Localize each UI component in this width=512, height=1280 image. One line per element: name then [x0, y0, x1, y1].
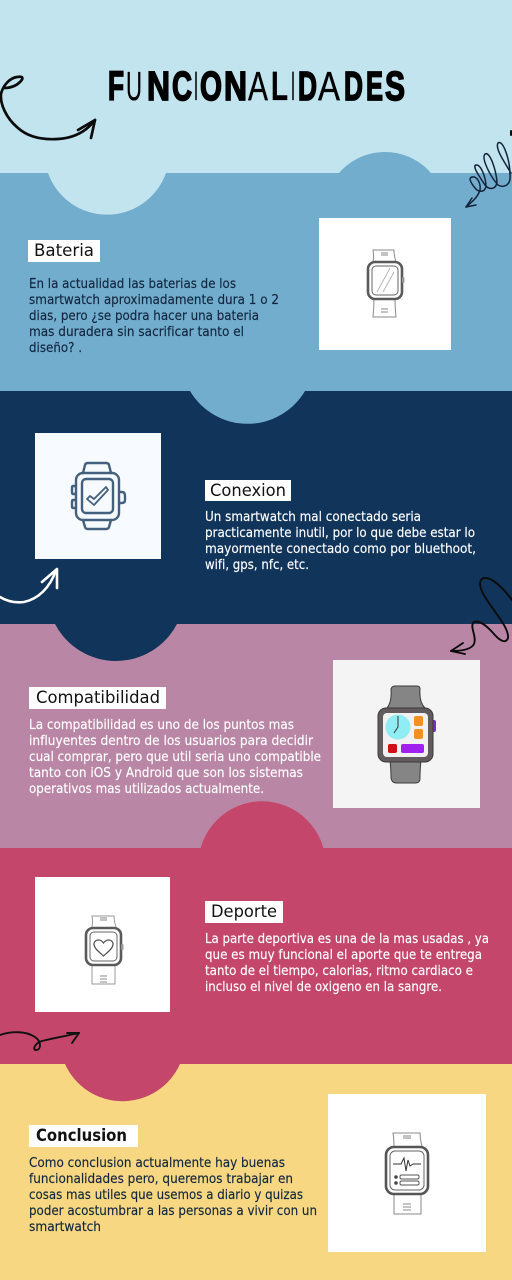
text block: conexion: practicamente inutil, por lo que debe estar lo — [205, 526, 475, 541]
section: conexion — [35, 433, 476, 573]
panel: conclusion background — [0, 1064, 512, 1280]
arrow: spring arrow — [466, 131, 511, 207]
title — [108, 63, 405, 109]
title: E — [366, 63, 383, 109]
section: bateria — [28, 218, 451, 356]
arrow: white curved arrow — [0, 569, 57, 602]
text block: conclusion: poder acostumbrar a las personas a vivir con un — [29, 1204, 317, 1219]
text block: deporte — [205, 932, 489, 995]
heading: bateria: Bateria — [34, 241, 94, 260]
arrow: deporte arrow — [0, 1032, 79, 1050]
text block: compatibilidad: cual comprar, pero que util seria uno compatible — [29, 750, 321, 765]
heading: conexion: Conexion — [210, 481, 286, 500]
heading: deporte: Deporte — [211, 902, 277, 921]
title: N — [147, 63, 170, 109]
text block: bateria: mas duradera sin sacrificar tanto el — [29, 325, 244, 340]
title: O — [200, 63, 222, 109]
title: C — [172, 63, 192, 109]
text block: compatibilidad: tanto con iOS y Android que son los sistemas — [29, 766, 303, 781]
text block: bateria — [29, 277, 279, 356]
text block: bateria: En la actualidad las baterias de los — [29, 277, 236, 292]
decorative scallop: header into bateria — [48, 173, 166, 215]
panel: header background — [0, 0, 512, 173]
title: A — [248, 63, 268, 109]
image: plain smartwatch — [319, 218, 451, 350]
text block: deporte: tanto de el tiempo, calorias, ritmo cardiaco e — [205, 964, 473, 979]
text block: conclusion: Como conclusion actualmente hay buenas — [29, 1156, 285, 1171]
text block: deporte: que es muy funcional el aporte que te entrega — [205, 948, 482, 963]
panel: conexion background — [0, 391, 512, 624]
text block: bateria: smartwatch aproximadamente dura 1 o 2 — [29, 293, 279, 308]
panel: compatibilidad background — [0, 624, 512, 848]
decorative scallop: bateria into conexion — [190, 391, 305, 424]
text block: conclusion — [29, 1156, 317, 1235]
panel: deporte background — [0, 801, 512, 1064]
title: D — [298, 63, 317, 109]
image: colourful smartwatch — [333, 660, 480, 808]
title: A — [318, 63, 341, 109]
panel: bateria background — [0, 152, 512, 391]
text block: deporte: La parte deportiva es una de la mas usadas , ya — [205, 932, 489, 947]
text block: compatibilidad — [29, 718, 321, 797]
image: watch with heart — [35, 877, 170, 1012]
decorative scallop: deporte into conclusion — [65, 1064, 180, 1101]
heading: conclusion: Conclusion — [36, 1126, 127, 1145]
text block: bateria: diseño? . — [29, 341, 82, 356]
section: deporte — [35, 877, 489, 1012]
title: S — [385, 63, 405, 109]
title: L — [271, 63, 288, 109]
text block: deporte: incluso el nivel de oxigeno en la sangre. — [205, 980, 442, 995]
arrow: looped header arrow — [1, 77, 95, 139]
decorative scallop: conexion into compatibilidad — [55, 624, 177, 661]
section: compatibilidad — [29, 660, 480, 808]
text block: compatibilidad: operativos mas utilizados actualmente. — [29, 782, 264, 797]
title: F — [108, 63, 124, 109]
title: D — [344, 63, 363, 109]
text block: conclusion: funcionalidades pero, queremos trabajar en — [29, 1172, 293, 1187]
text block: conexion: Un smartwatch mal conectado seria — [205, 510, 421, 525]
image: watch with heart-rate display — [328, 1094, 486, 1252]
heading: compatibilidad: Compatibilidad — [36, 688, 160, 707]
text block: conclusion: cosas mas utiles que usemos a diario y quizas — [29, 1188, 303, 1203]
text block: conclusion: smartwatch — [29, 1220, 101, 1235]
text block: compatibilidad: influyentes dentro de los usuarios para decidir — [29, 734, 314, 749]
text block: conexion: wifi, gps, nfc, etc. — [205, 558, 309, 573]
image: watch with check mark — [35, 433, 161, 559]
text block: conexion — [205, 510, 476, 573]
section: conclusion — [29, 1094, 486, 1252]
title: I — [291, 63, 295, 109]
text block: conexion: mayormente conectado como por bluethoot, — [205, 542, 476, 557]
title: N — [224, 63, 247, 109]
text block: compatibilidad: La compatibilidad es uno de los puntos mas — [29, 718, 294, 733]
title: I — [194, 63, 198, 109]
arrow: squiggle arrow — [451, 578, 512, 654]
text block: bateria: dias, pero ¿se podra hacer una bateria — [29, 309, 259, 324]
title: U — [126, 63, 142, 109]
